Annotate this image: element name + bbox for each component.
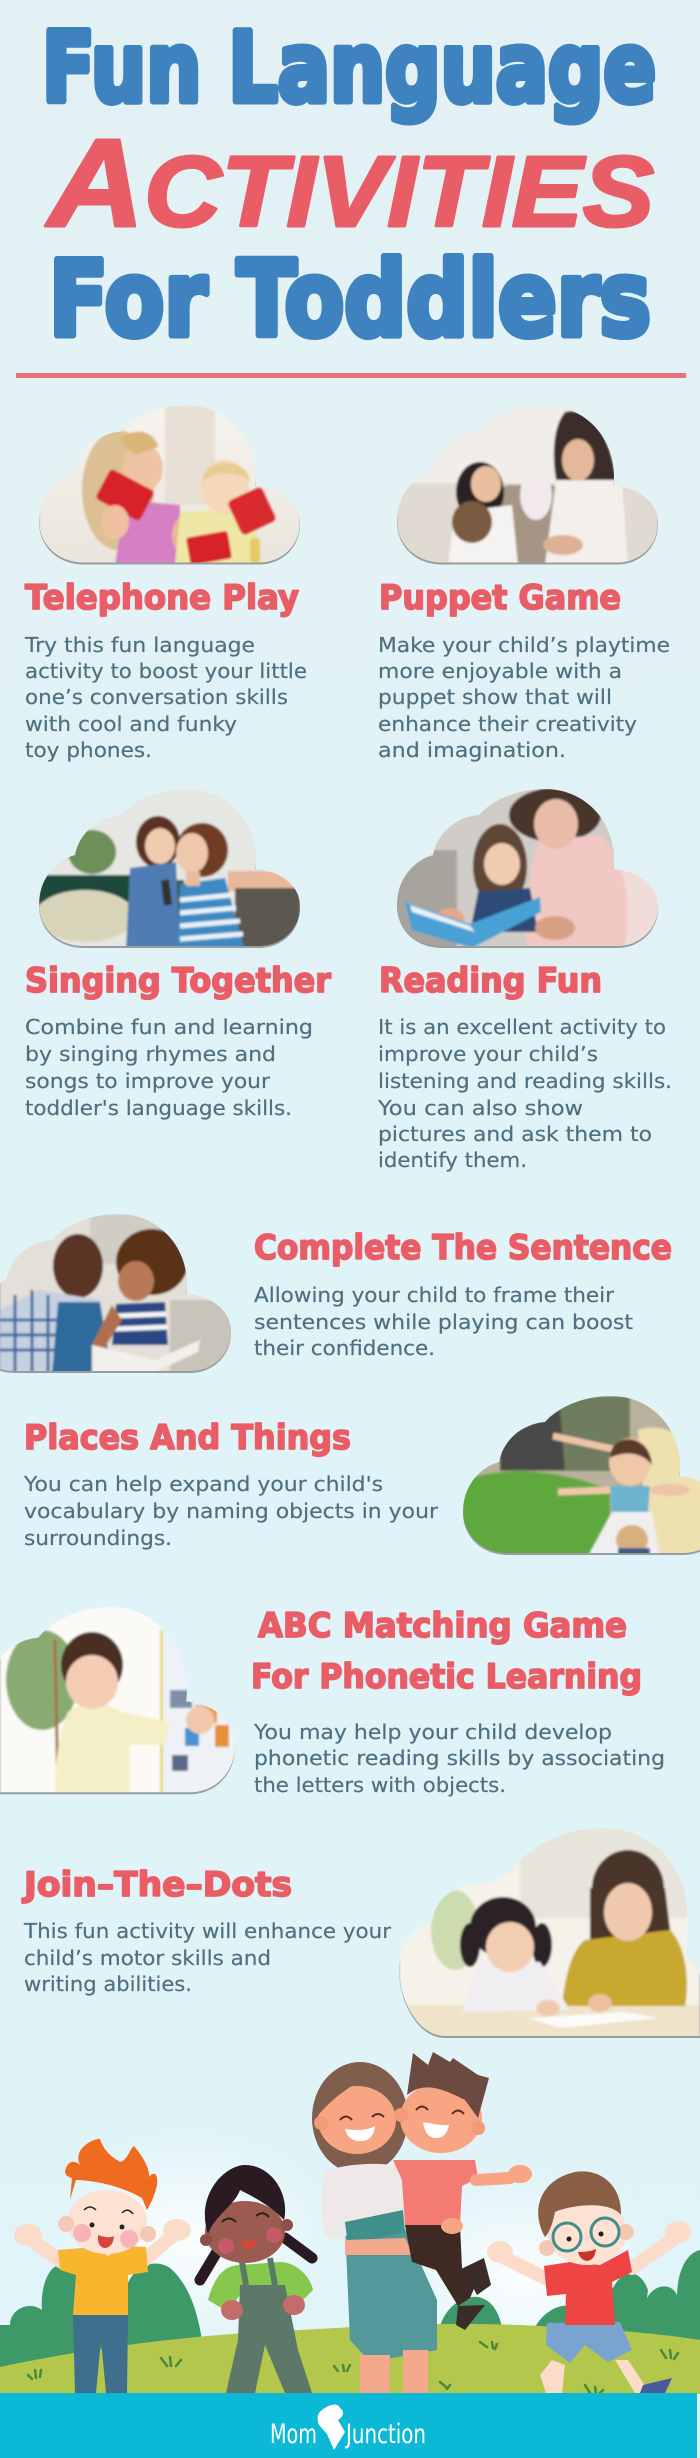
body text: one’s conversation skills <box>25 685 288 709</box>
logo: MomJunction: Junction <box>345 2419 426 2450</box>
character: mother <box>312 2062 437 2393</box>
braids <box>200 2238 312 2280</box>
photo: mother pointing with toddler outdoors <box>463 1396 700 1556</box>
photo: mother and daughter puppet show <box>397 405 658 565</box>
body text: phonetic reading skills by associating <box>254 1746 665 1770</box>
body text: Allowing your child to frame their <box>254 1283 615 1307</box>
heading <box>251 1606 642 1697</box>
body text: songs to improve your <box>25 1069 271 1093</box>
body text: and imagination. <box>378 738 566 762</box>
body text <box>377 1015 672 1172</box>
photo: mother and child with toy phones <box>39 405 300 565</box>
character: girl with braids <box>200 2165 313 2393</box>
panel: singing together <box>25 789 331 1120</box>
body text: with cool and funky <box>25 712 237 736</box>
body text: sentences while playing can boost <box>254 1310 633 1334</box>
title line: Activities: ACTIVITIES <box>45 114 654 253</box>
panel: abc matching game <box>0 1606 665 1797</box>
heading: Singing Together <box>25 961 331 1001</box>
bushes <box>0 2250 700 2375</box>
body text: their confidence. <box>254 1336 435 1360</box>
panel: places and things <box>23 1396 700 1556</box>
heading: Reading Fun <box>379 961 602 1001</box>
photo: mother reading with daughter <box>397 788 660 950</box>
character: orange-haired boy <box>14 2139 191 2393</box>
body text: more enjoyable with a <box>378 659 622 683</box>
photo: father and daughter with book <box>0 1214 232 1375</box>
heading: ABC Matching Game <box>258 1606 627 1646</box>
heading: Places And Things <box>24 1418 351 1458</box>
character: boy held by mother <box>393 2052 532 2330</box>
photo: girl with alphabet chart <box>0 1607 240 1797</box>
body text: This fun activity will enhance your <box>23 1919 392 1943</box>
body text <box>24 633 307 762</box>
body text: listening and reading skills. <box>378 1069 672 1093</box>
body text: It is an excellent activity to <box>378 1015 666 1039</box>
illustration: family and children in a park <box>0 2052 700 2394</box>
body text <box>254 1283 633 1360</box>
panel: telephone play <box>24 405 307 762</box>
panel: join the dots <box>22 1828 700 2038</box>
body text: writing abilities. <box>24 1972 192 1996</box>
body text: the letters with objects. <box>254 1773 506 1797</box>
title <box>42 12 656 360</box>
heading: Puppet Game <box>379 578 621 618</box>
logo icon <box>318 2405 345 2450</box>
body text: improve your child’s <box>378 1042 598 1066</box>
arms and hands <box>14 2219 191 2262</box>
body text: child’s motor skills and <box>24 1946 271 1970</box>
body text: Make your child’s playtime <box>378 633 670 657</box>
sky glow <box>40 2130 670 2390</box>
heading: Complete The Sentence <box>254 1228 672 1268</box>
logo: MomJunction <box>270 2405 426 2450</box>
body text: by singing rhymes and <box>25 1042 276 1066</box>
photo: mother and daughter writing <box>399 1828 700 2038</box>
body text <box>23 1919 392 1996</box>
body text: You can help expand your child's <box>23 1472 383 1496</box>
body text: Combine fun and learning <box>25 1015 313 1039</box>
body text: toy phones. <box>25 738 152 762</box>
wordmark: Mom <box>270 2419 317 2450</box>
body text: surroundings. <box>24 1526 172 1550</box>
heading: Telephone Play <box>25 578 299 618</box>
panel: puppet game <box>378 405 670 762</box>
body text <box>23 1472 439 1550</box>
panel: reading fun <box>377 788 672 1172</box>
body text: pictures and ask them to <box>378 1122 652 1146</box>
body text: You may help your child develop <box>253 1720 612 1744</box>
heading: For Phonetic Learning <box>251 1657 642 1697</box>
heading: Join–The–Dots <box>22 1865 292 1905</box>
body text: puppet show that will <box>378 685 612 709</box>
panel: complete the sentence <box>0 1214 672 1375</box>
title divider <box>16 373 686 378</box>
body text <box>25 1015 313 1120</box>
body text <box>253 1720 665 1797</box>
body text: vocabulary by naming objects in your <box>24 1499 439 1523</box>
body text: activity to boost your little <box>25 659 307 683</box>
body text: toddler's language skills. <box>25 1096 292 1120</box>
body text: identify them. <box>378 1148 527 1172</box>
body text: enhance their creativity <box>378 712 637 736</box>
body text <box>378 633 670 762</box>
ground <box>0 2324 700 2394</box>
body text: You can also show <box>377 1096 583 1120</box>
grass tufts <box>28 2342 678 2394</box>
photo: mother and daughter singing <box>35 789 300 949</box>
character: boy with glasses <box>487 2171 691 2393</box>
body text: Try this fun language <box>24 633 255 657</box>
footer band <box>0 2393 697 2458</box>
